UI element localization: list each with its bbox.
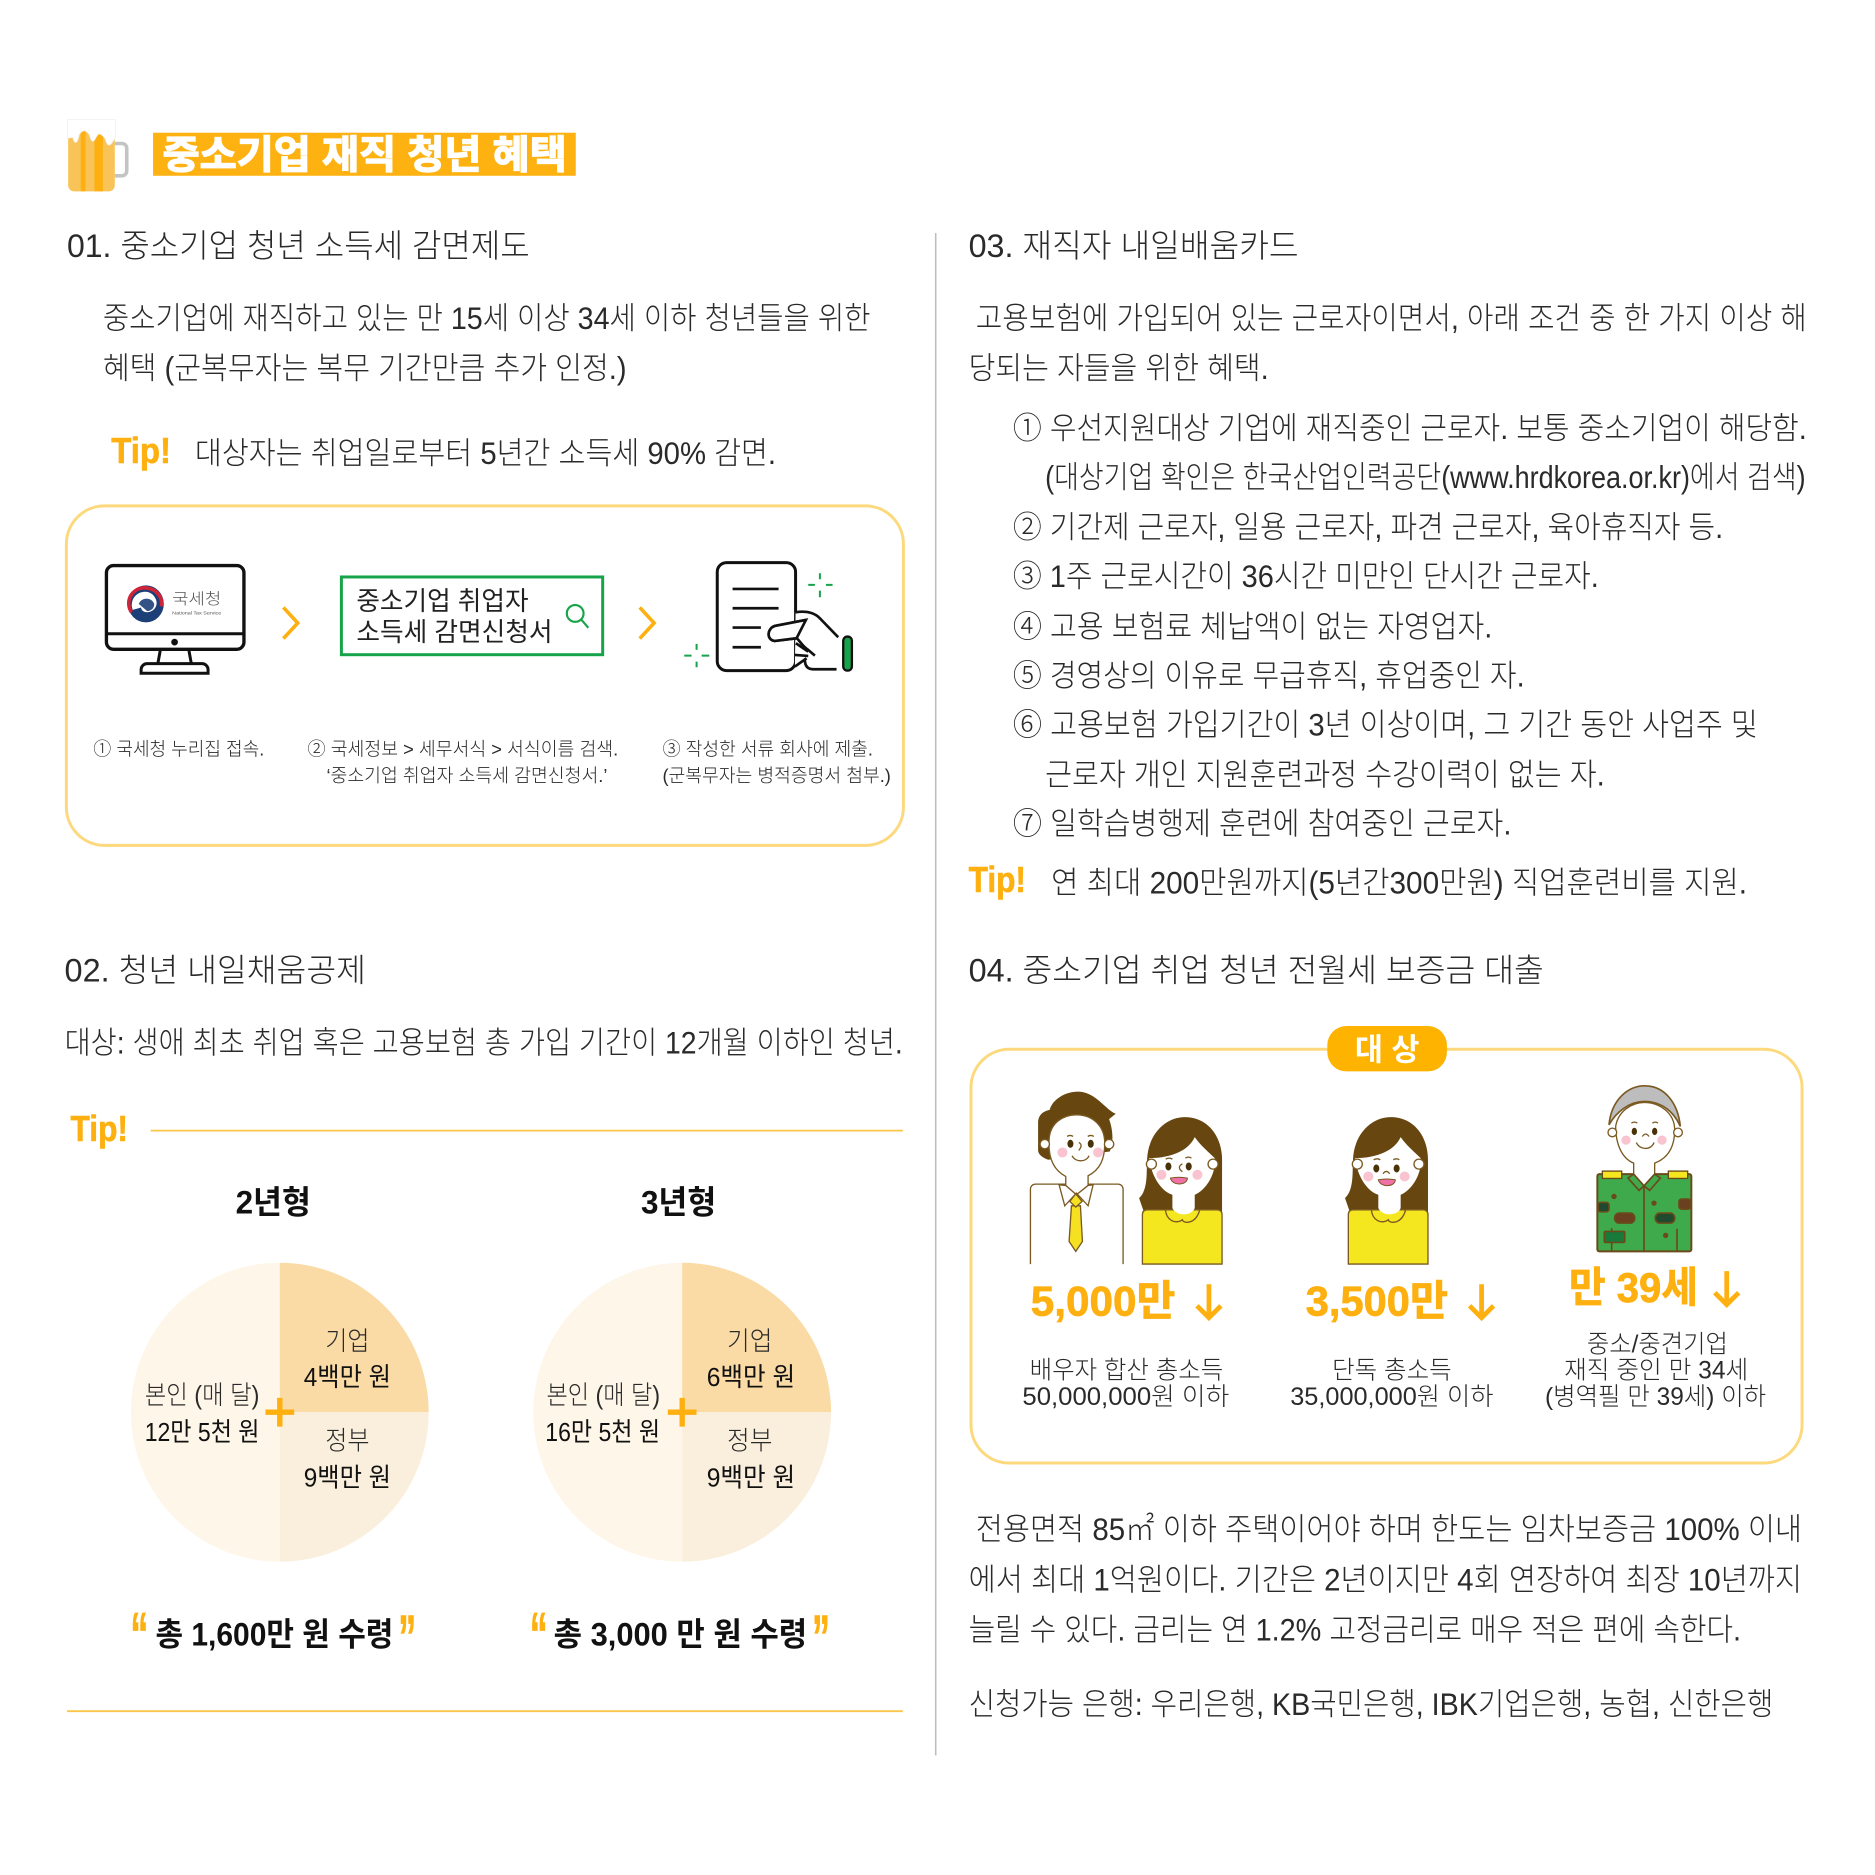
caption: couple income: 배우자 합산 총소득 [1030,1357,1223,1385]
icon: monitor with national tax service logo [106,566,244,673]
woman [1139,1117,1222,1264]
caption: age condition: 재직 중인 만 34세 [1564,1357,1748,1385]
list: 03 conditions: 근로자 개인 지원훈련과정 수강이력이 없는 자. [1045,758,1605,793]
text block: available banks: 신청가능 은행: 우리은행, KB국민은행, IBK기업은행, 농협, 신한은행 [969,1687,1773,1722]
text block: 04 description: 에서 최대 1억원이다. 기간은 2년이지만 4회 연장하여 최장 10년까지 [969,1562,1802,1597]
pie chart: 6백만 원 [707,1362,795,1392]
pie chart: 4백만 원 [304,1362,391,1392]
search box: 중소기업 취업자 [356,586,529,616]
pie chart [533,1263,831,1562]
heading: 2-year type: 2년형 [236,1185,311,1221]
caption: couple income: 50,000,000원 이하 [1022,1383,1229,1411]
pie chart: 정부 [727,1425,772,1455]
text block: 01 description: 중소기업에 재직하고 있는 만 15세 이상 34세 이하 청년들을 위한 [103,301,871,336]
pie chart: 본인 (매 달) [145,1380,259,1410]
text block: 03 description: 당되는 자들을 위한 혜택. [969,351,1269,386]
icon: monitor with national tax service logo: 국세청 [172,590,221,608]
text block: 04 description: 늘릴 수 있다. 금리는 연 1.2% 고정금리로 매우 적은 편에 속한다. [969,1613,1741,1648]
list: 03 conditions: ⑥ 고용보험 가입기간이 3년 이상이며, 그 기간 동안 사업주 및 [1013,707,1758,742]
stat: age 39: 만 39세 [1569,1264,1698,1311]
caption: age condition [1545,1330,1766,1411]
caption: step 2: ② 국세정보 > 세무서식 > 서식이름 검색. [307,739,618,760]
icon: married couple [1030,1092,1222,1264]
tip: 02: Tip! [71,1109,128,1149]
list: 03 conditions: ① 우선지원대상 기업에 재직중인 근로자. 보통 중소기업이 해당함. [1013,411,1807,446]
list: 03 conditions: ② 기간제 근로자, 일용 근로자, 파견 근로자, 육아휴직자 등. [1013,510,1723,545]
icon: monitor with national tax service logo: National Tax Service [172,611,222,617]
caption: step 2: ‘중소기업 취업자 소득세 감면신청서.’ [326,765,607,786]
search box: 소득세 감면신청서 [356,617,552,647]
pie chart: 정부 [325,1425,369,1455]
heading: 03: 03. 재직자 내일배움카드 [969,228,1299,264]
icon: document and hand [684,563,852,671]
total: 3-year type [530,1601,830,1673]
badge: target [1327,1026,1447,1071]
pie chart: 기업 [325,1326,369,1356]
caption: couple income [1022,1357,1229,1411]
heading: 3-year type: 3년형 [641,1185,716,1221]
text block: 02 eligibility: 대상: 생애 최초 취업 혹은 고용보험 총 가입 기간이 12개월 이하인 청년. [65,1025,903,1060]
icon: soldier [1597,1086,1691,1251]
pie chart: 기업 [727,1326,772,1356]
caption: step 2 [307,739,618,786]
stat: 3,500: 3,500만 [1306,1277,1448,1324]
stat: 5,000: 5,000만 [1031,1277,1175,1324]
caption: age condition: 중소/중견기업 [1587,1330,1728,1358]
icon: beer mug [68,120,127,191]
icon: single woman [1345,1117,1428,1264]
list: 03 conditions: ③ 1주 근로시간이 36시간 미만인 단시간 근로자. [1013,559,1599,594]
caption: step 3 [662,739,891,786]
chart: 3-year type [530,1185,831,1673]
text block: 04 description: 전용면적 85㎡ 이하 주택이어야 하며 한도는 임차보증금 100% 이내 [976,1512,1802,1547]
text block: 03 description [969,301,1807,386]
total: 2-year type: 총 1,600만 원 수령 [155,1616,393,1652]
pie chart: 9백만 원 [304,1462,391,1492]
pie chart: 12만 5천 원 [145,1417,259,1447]
heading: 01: 01. 중소기업 청년 소득세 감면제도 [67,228,530,264]
arrow: step 2 to 3 [640,607,654,639]
title: 중소기업 재직 청년 혜택 [163,134,567,178]
heading: 04: 04. 중소기업 취업 청년 전월세 보증금 대출 [969,953,1544,989]
caption: step 1: ① 국세청 누리집 접속. [93,739,264,760]
tip: 03: Tip! [969,860,1026,900]
text block: 03 description: 고용보험에 가입되어 있는 근로자이면서, 아래 조건 중 한 가지 이상 해 [976,301,1807,336]
list: 03 conditions: ⑤ 경영상의 이유로 무급휴직, 휴업중인 자. [1013,658,1525,693]
list: 03 conditions: ④ 고용 보험료 체납액이 없는 자영업자. [1013,609,1492,644]
tip: 01: 대상자는 취업일로부터 5년간 소득세 90% 감면. [195,436,776,471]
caption: step 3: ③ 작성한 서류 회사에 제출. [662,739,873,760]
caption: step 3: (군복무자는 병적증명서 첨부.) [662,765,891,786]
tip: 01: Tip! [111,431,171,471]
list: 03 conditions [1013,411,1807,842]
panel: loan eligibility [971,1026,1802,1463]
caption: single income: 35,000,000원 이하 [1290,1383,1494,1411]
total: 3-year type: 총 3,000 만 원 수령 [554,1616,807,1652]
total: 2-year type: ” [398,1604,416,1673]
total: 3-year type: “ [530,1601,548,1670]
caption: single income: 단독 총소득 [1332,1357,1452,1385]
caption: single income [1290,1357,1494,1411]
tip: 03: 연 최대 200만원까지(5년간300만원) 직업훈련비를 지원. [1051,865,1747,900]
caption: age condition: (병역필 만 39세) 이하 [1545,1383,1766,1411]
man [1030,1092,1123,1264]
panel: application steps [66,506,903,845]
total: 2-year type: “ [130,1601,148,1670]
search box [341,577,603,655]
list: 03 conditions: ⑦ 일학습병행제 훈련에 참여중인 근로자. [1013,807,1511,842]
pie chart: 9백만 원 [707,1462,795,1492]
pie chart: 본인 (매 달) [546,1380,660,1410]
text block: 01 description: 혜택 (군복무자는 복무 기간만큼 추가 인정.) [103,351,627,386]
badge: target: 대 상 [1355,1033,1419,1068]
text block: 01 description [103,301,871,386]
chart: 2-year type [130,1185,429,1673]
arrow: step 1 to 2 [283,607,298,639]
pie chart [131,1263,429,1562]
heading: 02: 02. 청년 내일채움공제 [65,953,366,989]
pie chart: 16만 5천 원 [545,1417,660,1447]
total: 3-year type: ” [812,1604,830,1673]
text block: 04 description [969,1512,1802,1648]
total: 2-year type [130,1601,416,1673]
